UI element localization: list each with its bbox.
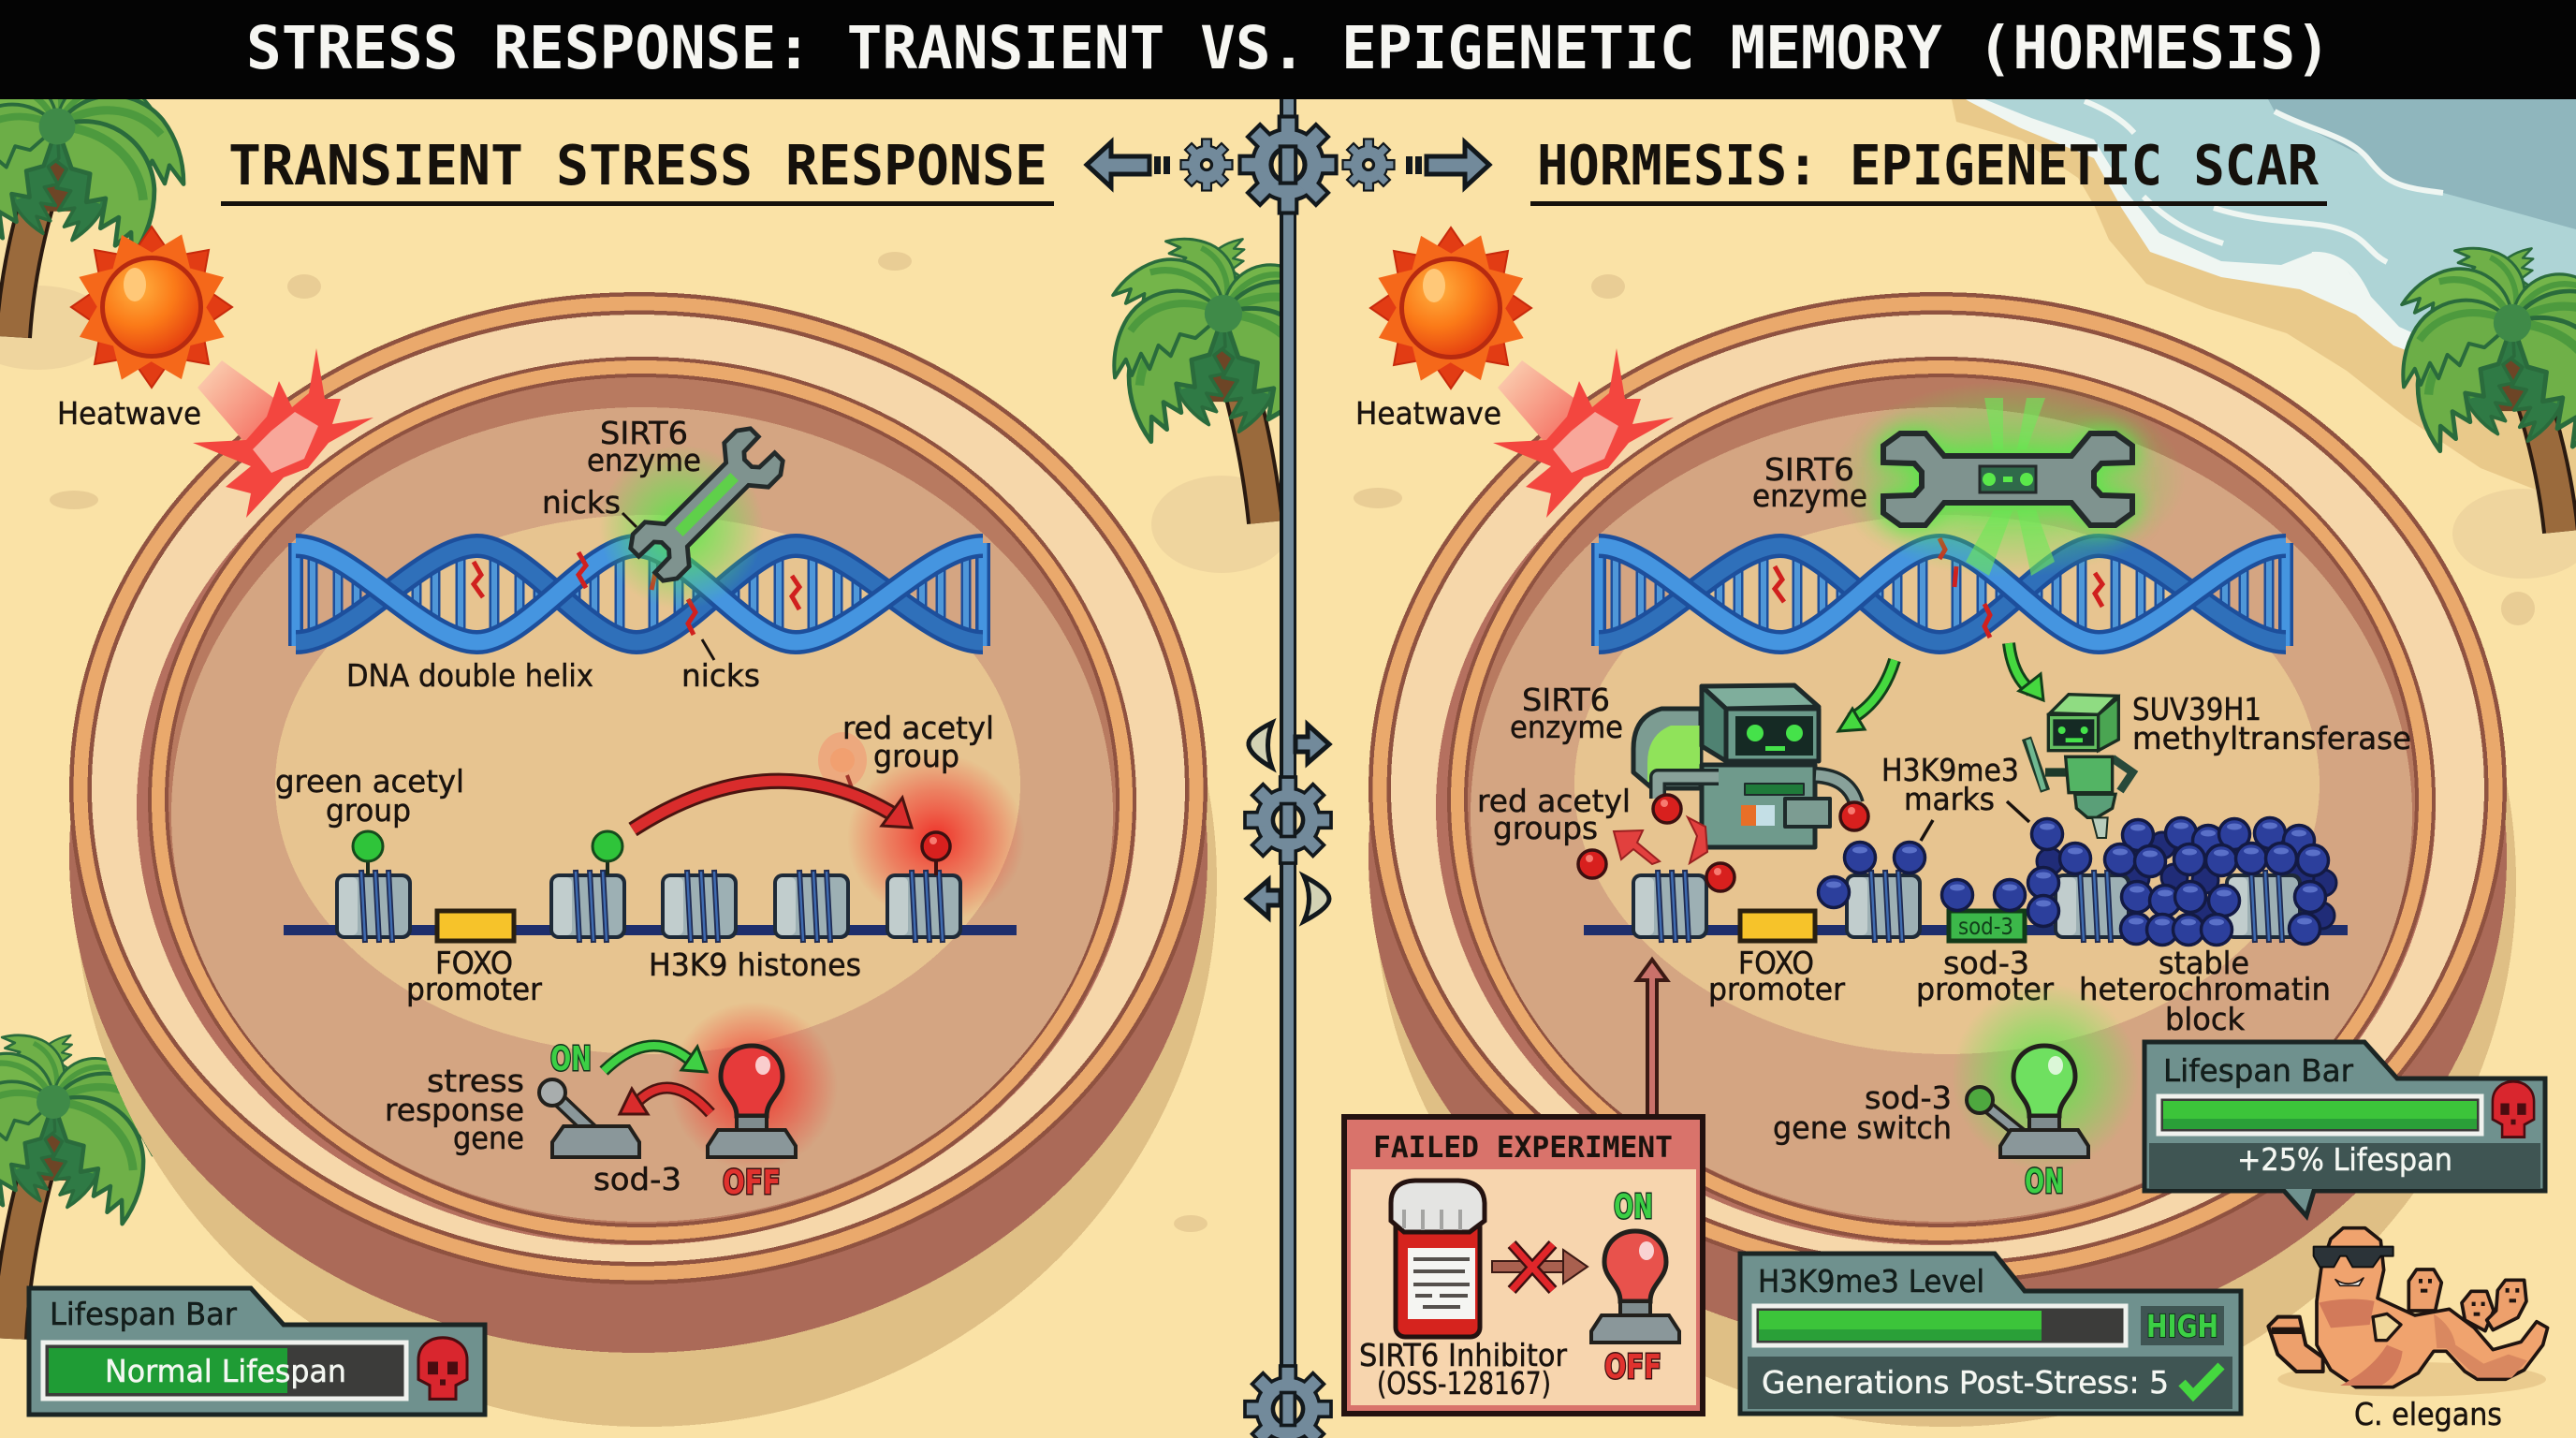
label: H3K9me3 marks: H3K9me3	[1881, 752, 2019, 788]
label: sod-3 promoter	[1916, 945, 2054, 1007]
label: SIRT6 enzyme upper right: SIRT6	[1764, 451, 1854, 488]
panel: H3K9me3 level: H3K9me3 Level	[1758, 1263, 1984, 1299]
palm tree: lower left	[0, 1020, 181, 1339]
centre divider	[1280, 99, 1296, 1438]
H3K9me3 methyl dots	[1818, 843, 2026, 910]
panel: left lifespan bar: Lifespan Bar	[50, 1296, 237, 1332]
icon: left red bulb	[669, 1002, 838, 1170]
heading: hormesis epigenetic scar: HORMESIS: EPIGENETIC SCAR	[1537, 133, 2319, 198]
icon: check mark	[2182, 1366, 2221, 1395]
diagram: right chromatin strand	[1584, 818, 2348, 946]
icon: faded red acetyl group and transfer arrow	[633, 732, 912, 829]
chart: left DNA double helix with nicks	[296, 543, 983, 646]
label: FOXO promoter left: FOXO	[435, 945, 513, 981]
FOXO promoter box right	[1740, 911, 1815, 941]
label: SUV39H1 methyltransferase: SUV39H1	[2132, 691, 2261, 727]
icon: red acetyl groups ejected	[1578, 817, 1707, 878]
icon: right SIRT6 wrench	[1830, 381, 2186, 578]
smile	[2335, 1278, 2364, 1285]
icon: right heat burst	[1493, 348, 1674, 518]
robot arms	[1658, 775, 1856, 803]
label: H3K9me3 marks	[1881, 752, 2029, 841]
small worm with face 3	[2487, 1280, 2526, 1330]
label: stable heterochromatin block: stable	[2159, 945, 2249, 981]
red acetyl group	[922, 832, 950, 875]
label: sod-3 left: sod-3	[593, 1161, 681, 1197]
label: green acetyl group	[275, 763, 464, 829]
panel: H3K9me3 level	[1740, 1254, 2241, 1414]
label: sod-3 promoter: promoter	[1916, 971, 2054, 1007]
icon: right heatwave sun	[1348, 205, 1554, 411]
label: sod-3 gene switch	[1773, 1079, 1952, 1146]
label: sod-3 gene switch: gene switch	[1773, 1109, 1952, 1146]
label: SIRT6 enzyme left: enzyme	[587, 442, 701, 478]
icon: SUV39H1 robot	[2027, 695, 2132, 838]
label: nicks top: nicks	[542, 484, 621, 521]
label: SIRT6 inhibitor	[1359, 1337, 1567, 1401]
label: DNA double helix: DNA double helix	[346, 657, 593, 694]
panel: right lifespan bar: +25% Lifespan	[2237, 1141, 2452, 1178]
sunglasses	[2314, 1247, 2393, 1267]
label: SIRT6 enzyme lower right	[1510, 682, 1623, 745]
arrow: inhibitor to histone	[1637, 960, 1667, 1116]
panel: H3K9me3 level: Generations Post-Stress: 5	[1762, 1364, 2169, 1401]
ocean and surf	[1952, 99, 2576, 506]
icon: left lever switch	[539, 1079, 639, 1157]
icon: left heat burst	[193, 348, 373, 518]
arrow: green to SIRT6 robot	[1838, 660, 1895, 731]
label: red acetyl group: red acetyl	[842, 710, 994, 746]
label: stress response gene: gene	[453, 1120, 524, 1156]
chart: right DNA double helix with nicks	[1599, 538, 2286, 646]
small worm left with sunglasses	[2268, 1317, 2323, 1372]
label: SIRT6 enzyme lower right: enzyme	[1510, 709, 1623, 745]
title bar	[0, 0, 2576, 99]
nucleus: right	[1368, 296, 2516, 1427]
panel: H3K9me3 level: HIGH	[2146, 1308, 2218, 1344]
robot head	[1702, 685, 1819, 761]
icon: centre bottom gear	[1243, 1364, 1333, 1438]
diagram: left chromatin strand	[284, 754, 1025, 943]
label: stress response gene	[385, 1063, 524, 1156]
FOXO promoter box	[437, 911, 514, 941]
label: FOXO promoter right: FOXO	[1738, 945, 1814, 981]
icon: C. elegans worms	[2268, 1228, 2548, 1397]
label: stable heterochromatin block: heterochromatin	[2079, 971, 2331, 1007]
label: ON right: ON	[2025, 1163, 2064, 1201]
label: nicks bottom	[681, 639, 760, 694]
label: sod-3 promoter: sod-3	[1943, 945, 2029, 981]
label: green acetyl group: group	[326, 792, 411, 829]
panel: right lifespan bar: Lifespan Bar	[2163, 1052, 2353, 1089]
panel: failed experiment: FAILED EXPERIMENT	[1373, 1131, 1673, 1165]
panel: left lifespan bar	[29, 1288, 485, 1415]
big worm body	[2314, 1228, 2548, 1387]
icon: centre middle gear and arrows	[1243, 723, 1333, 921]
label: SUV39H1 methyltransferase: methyltransferase	[2132, 720, 2411, 756]
title bar: STRESS RESPONSE: TRANSIENT VS. EPIGENETIC MEMORY (HORMESIS)	[246, 14, 2331, 82]
palm tree: centre left panel	[1111, 238, 1280, 524]
label: red acetyl group	[842, 710, 994, 774]
green acetyl groups	[353, 831, 622, 875]
label: SIRT6 inhibitor: SIRT6 Inhibitor	[1359, 1337, 1567, 1373]
panel: right lifespan bar	[2144, 1042, 2545, 1216]
panel: failed experiment	[1344, 1117, 1703, 1414]
label: ON left: ON	[550, 1040, 592, 1078]
label: FOXO promoter right	[1708, 945, 1845, 1007]
nucleus: left	[69, 296, 1217, 1427]
sand patches	[0, 286, 2576, 579]
label: red acetyl groups	[1477, 783, 1631, 846]
label: H3K9 histones: H3K9 histones	[649, 946, 861, 983]
sand specks	[50, 252, 2535, 1232]
label: FOXO promoter left: promoter	[406, 971, 542, 1007]
robot backpack	[1633, 709, 1701, 788]
arrow: red switch off	[620, 1088, 710, 1114]
label: sod-3 gene switch: sod-3	[1865, 1079, 1952, 1116]
arrow: green switch on	[604, 1046, 707, 1072]
icon: SIRT6 robot	[1633, 685, 1868, 847]
label: FOXO promoter left	[406, 945, 542, 1007]
label: SIRT6 enzyme upper right	[1752, 451, 1867, 514]
label: right heatwave: Heatwave	[1355, 395, 1501, 432]
icon: centre top gear assembly	[1087, 114, 1489, 215]
label: stable heterochromatin block	[2079, 945, 2331, 1037]
label: FOXO promoter right: promoter	[1708, 971, 1845, 1007]
palm tree: right	[2382, 231, 2576, 532]
icon: left SIRT6 wrench	[599, 422, 789, 609]
palm tree: top left	[0, 37, 195, 337]
label: H3K9me3 marks: marks	[1904, 781, 1995, 817]
small worm with face 2	[2462, 1291, 2494, 1331]
label: nicks bottom: nicks	[681, 657, 760, 694]
label: SUV39H1 methyltransferase	[2132, 691, 2411, 756]
heterochromatin block	[2027, 818, 2336, 946]
arrow: blocked inhibitor	[1492, 1244, 1588, 1290]
icon: SIRT6 inhibitor pill bottle	[1391, 1181, 1485, 1337]
icon: red bulb in failed experiment	[1591, 1231, 1679, 1343]
label: stress response gene: stress	[427, 1063, 524, 1099]
label: OFF in failed experiment: OFF	[1604, 1348, 1661, 1387]
sod-3 promoter box: sod-3	[1958, 913, 2013, 940]
label: SIRT6 enzyme upper right: enzyme	[1752, 477, 1867, 514]
label: green acetyl group: green acetyl	[275, 763, 464, 800]
robot body	[1702, 765, 1830, 847]
label: C. elegans: C. elegans	[2354, 1396, 2502, 1432]
label: left heatwave: Heatwave	[57, 395, 201, 432]
label: stress response gene: response	[385, 1092, 524, 1128]
label: ON in failed experiment: ON	[1614, 1188, 1653, 1226]
label: SIRT6 inhibitor: (OSS-128167)	[1377, 1365, 1551, 1401]
label: SIRT6 enzyme left	[587, 415, 701, 478]
label: red acetyl groups: groups	[1493, 810, 1598, 846]
panel: left lifespan bar: Normal Lifespan	[105, 1353, 346, 1389]
label: stable heterochromatin block: block	[2165, 1001, 2246, 1037]
label: OFF left: OFF	[723, 1164, 781, 1202]
label: red acetyl groups: red acetyl	[1477, 783, 1631, 819]
icon: green bulb with switch	[1952, 983, 2139, 1170]
icon: left heatwave sun	[49, 204, 255, 410]
label: SIRT6 enzyme lower right: SIRT6	[1522, 682, 1610, 718]
small worm with face 1	[2408, 1269, 2441, 1311]
label: SIRT6 enzyme left: SIRT6	[600, 415, 688, 451]
heading: transient stress response: TRANSIENT STRESS RESPONSE	[228, 133, 1047, 198]
arrow: green to methyltransferase robot	[2009, 643, 2043, 700]
label: red acetyl group: group	[873, 738, 959, 774]
